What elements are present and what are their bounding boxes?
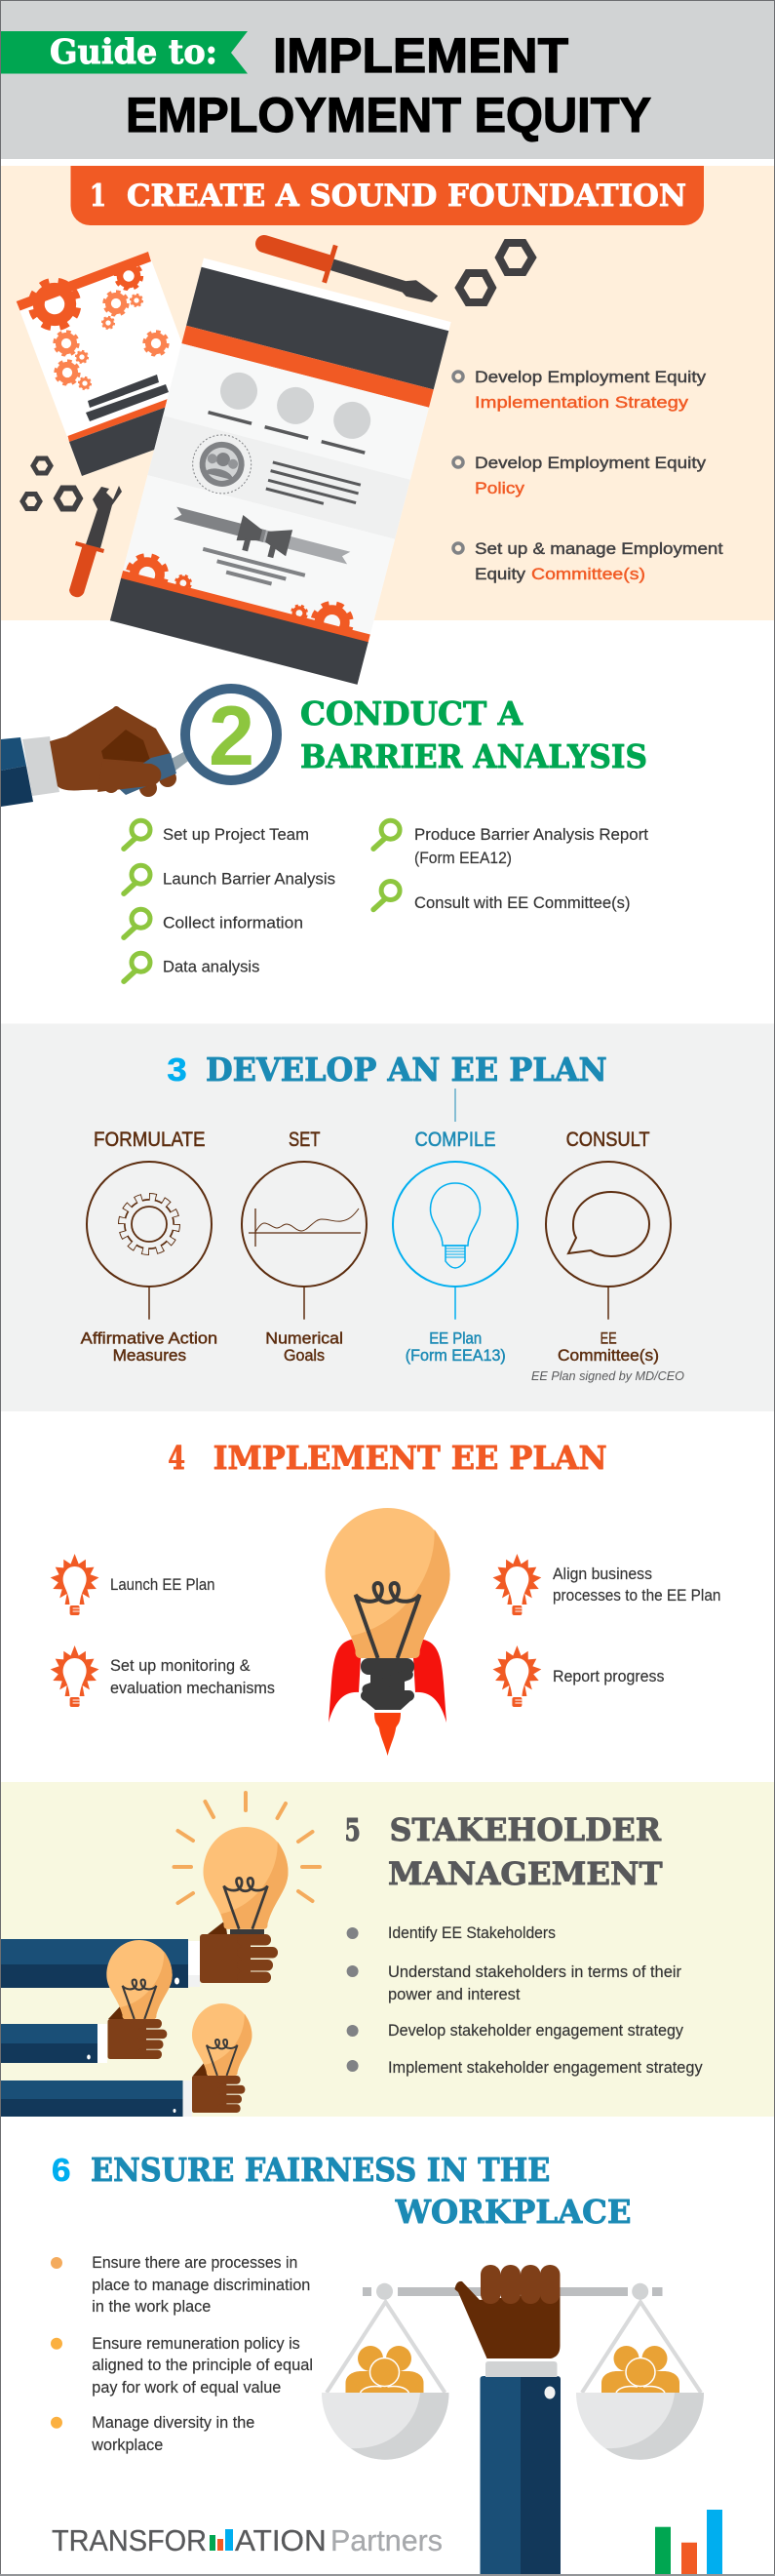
item: Set up monitoring &: [110, 1656, 251, 1675]
illustration: rays of light: [174, 1793, 320, 1903]
illustration: small gears document: [17, 252, 213, 476]
icon: nuts left: [22, 458, 80, 509]
left pan: [322, 2302, 448, 2460]
item: Align business: [553, 1565, 652, 1583]
heading: step 2: [300, 694, 647, 775]
logo: transformation partners: TRANSFOR: [52, 2523, 207, 2557]
item: Launch Barrier Analysis: [163, 870, 335, 889]
item: Implement stakeholder engagement strategy: [388, 2058, 703, 2077]
list: step 4 actions: [51, 1554, 720, 1707]
team bulb emblem: [186, 428, 257, 499]
item: [373, 820, 648, 867]
item: Identify EE Stakeholders: [388, 1923, 556, 1942]
heading: step 1: [70, 166, 704, 225]
right pan: [576, 2302, 704, 2460]
heading: step 4: IMPLEMENT EE PLAN: [213, 1439, 607, 1477]
heading: step 6: 6: [52, 2152, 70, 2188]
icon: light bulb: [431, 1183, 480, 1268]
item: processes to the EE Plan: [553, 1586, 720, 1605]
item: [373, 882, 630, 912]
bullet item 1: Develop Employment Equity: [475, 368, 707, 386]
logo: transformation partners: ATION: [235, 2523, 327, 2557]
magnifier ring: [185, 689, 277, 780]
illustration: balance scale: [322, 2265, 704, 2576]
item: Collect information: [163, 914, 303, 932]
item: [124, 909, 303, 937]
column: consult: [531, 1129, 684, 1383]
item: [51, 1645, 275, 1707]
heading: step 3: DEVELOP AN EE PLAN: [206, 1050, 607, 1089]
illustration: light bulb rocket: [326, 1508, 450, 1756]
column: set: SET: [289, 1129, 321, 1151]
item: [124, 953, 259, 981]
column: compile: [393, 1129, 518, 1365]
bullet item 3: Set up & manage Employment: [475, 539, 723, 558]
title: EMPLOYMENT EQUITY: [126, 88, 651, 142]
bullet item 2: Develop Employment Equity: [475, 454, 707, 472]
list: step 1 actions: [453, 368, 723, 583]
column: consult: EE: [601, 1329, 617, 1348]
bullet item 3: Equity: [475, 565, 526, 583]
column: compile: (Form EEA13): [406, 1346, 506, 1365]
item: evaluation mechanisms: [110, 1679, 275, 1697]
item: workplace: [91, 2436, 163, 2454]
item: Report progress: [553, 1667, 665, 1685]
bullet item 2: [453, 454, 707, 497]
heading: step 5: [344, 1811, 663, 1892]
heading: step 3: 3: [167, 1051, 187, 1088]
icon: wrench: [69, 486, 122, 597]
sleeve: [480, 2361, 561, 2576]
banner: guide to: [0, 31, 248, 74]
heading: step 5: STAKEHOLDER: [390, 1811, 661, 1848]
column: formulate: Measures: [113, 1346, 186, 1365]
bullet item 1: Implementation Strategy: [475, 393, 689, 412]
profile circles: [209, 367, 376, 453]
item: Ensure there are processes in: [92, 2253, 297, 2272]
column: consult: CONSULT: [566, 1129, 650, 1151]
column: set: Goals: [284, 1346, 325, 1365]
item: Data analysis: [163, 958, 259, 976]
column: formulate: [81, 1129, 217, 1365]
hand gripping beam: [454, 2265, 560, 2358]
list: step 6 actions: [51, 2253, 313, 2454]
item: Produce Barrier Analysis Report: [414, 825, 648, 844]
heading: step 1: CREATE A SOUND FOUNDATION: [127, 178, 686, 214]
item: [124, 865, 335, 893]
item: [51, 2253, 310, 2316]
icon: line chart: [249, 1209, 361, 1247]
icon: gear: [121, 1196, 177, 1252]
illustration: third bulb with hand: [1, 2003, 252, 2117]
item: Develop stakeholder engagement strategy: [388, 2021, 683, 2040]
item: Consult with EE Committee(s): [414, 893, 630, 912]
heading: step 6: [52, 2151, 632, 2231]
item: [493, 1645, 665, 1707]
panel: step 1 background: [0, 166, 775, 620]
bullet item 1: [453, 368, 707, 412]
item: Ensure remuneration policy is: [92, 2334, 300, 2353]
column: formulate: FORMULATE: [94, 1129, 206, 1151]
column: compile: EE Plan: [429, 1329, 482, 1348]
heading: step 5: MANAGEMENT: [388, 1855, 663, 1892]
illustration: hand with magnifying glass: [1, 689, 277, 807]
list: step 2 actions: [124, 820, 648, 981]
bullet item 3: Committee(s): [531, 565, 645, 583]
item: [51, 2413, 254, 2454]
column: set: Numerical: [265, 1329, 343, 1348]
logo: transformation partners: Partners: [330, 2523, 443, 2557]
heading: step 2: BARRIER ANALYSIS: [300, 737, 647, 775]
column: formulate: Affirmative Action: [81, 1329, 217, 1348]
footer gears: [110, 550, 375, 685]
item: [347, 1962, 681, 2003]
bullet item 3: [453, 539, 723, 583]
chart: corner bars: [655, 2510, 722, 2576]
heading: step 2: CONDUCT A: [300, 694, 523, 733]
logo: transformation partners: [52, 2523, 443, 2557]
item: [124, 820, 309, 849]
title: IMPLEMENT: [273, 28, 568, 83]
item: [51, 1554, 214, 1615]
item: pay for work of equal value: [92, 2378, 281, 2397]
heading: step 6: WORKPLACE: [395, 2193, 632, 2231]
icon: nuts top: [459, 243, 532, 302]
item: Set up Project Team: [163, 825, 309, 844]
heading: step 4: 4: [168, 1439, 185, 1477]
item: [493, 1554, 720, 1615]
illustration: main document: [110, 258, 451, 685]
item: place to manage discrimination: [92, 2276, 310, 2294]
item: power and interest: [388, 1985, 521, 2003]
item: in the work place: [92, 2297, 211, 2316]
column: set: [242, 1129, 367, 1365]
list: step 5 actions: [347, 1923, 703, 2077]
column: compile: COMPILE: [415, 1129, 495, 1151]
item: Launch EE Plan: [110, 1575, 214, 1594]
illustration: large bulb with hand: [1, 1827, 289, 1988]
heading: step 5: 5: [344, 1811, 361, 1848]
column: consult: Committee(s): [558, 1346, 659, 1365]
number 2: 2: [209, 690, 254, 783]
item: Understand stakeholders in terms of their: [388, 1962, 681, 1981]
column: consult: EE Plan signed by MD/CEO: [531, 1368, 684, 1383]
title: [126, 28, 651, 142]
item: Manage diversity in the: [92, 2413, 254, 2432]
header panel: [0, 0, 775, 159]
item: [51, 2334, 313, 2397]
banner: guide to: Guide to:: [50, 32, 217, 72]
bullet item 2: Policy: [475, 479, 525, 497]
panel: step 3: [0, 1024, 775, 1411]
illustration: second bulb with hand: [1, 1940, 173, 2063]
panel: step 5: [0, 1782, 775, 2117]
item: (Form EEA12): [414, 849, 512, 867]
beam: [363, 2283, 663, 2300]
heading: step 1: 1: [90, 178, 106, 214]
illustration: screwdriver: [251, 222, 444, 316]
ribbon and megaphones: [171, 498, 353, 576]
heading: step 6: ENSURE FAIRNESS IN THE: [91, 2151, 550, 2189]
icon: speech bubble: [568, 1192, 649, 1256]
item: aligned to the principle of equal: [92, 2356, 313, 2374]
